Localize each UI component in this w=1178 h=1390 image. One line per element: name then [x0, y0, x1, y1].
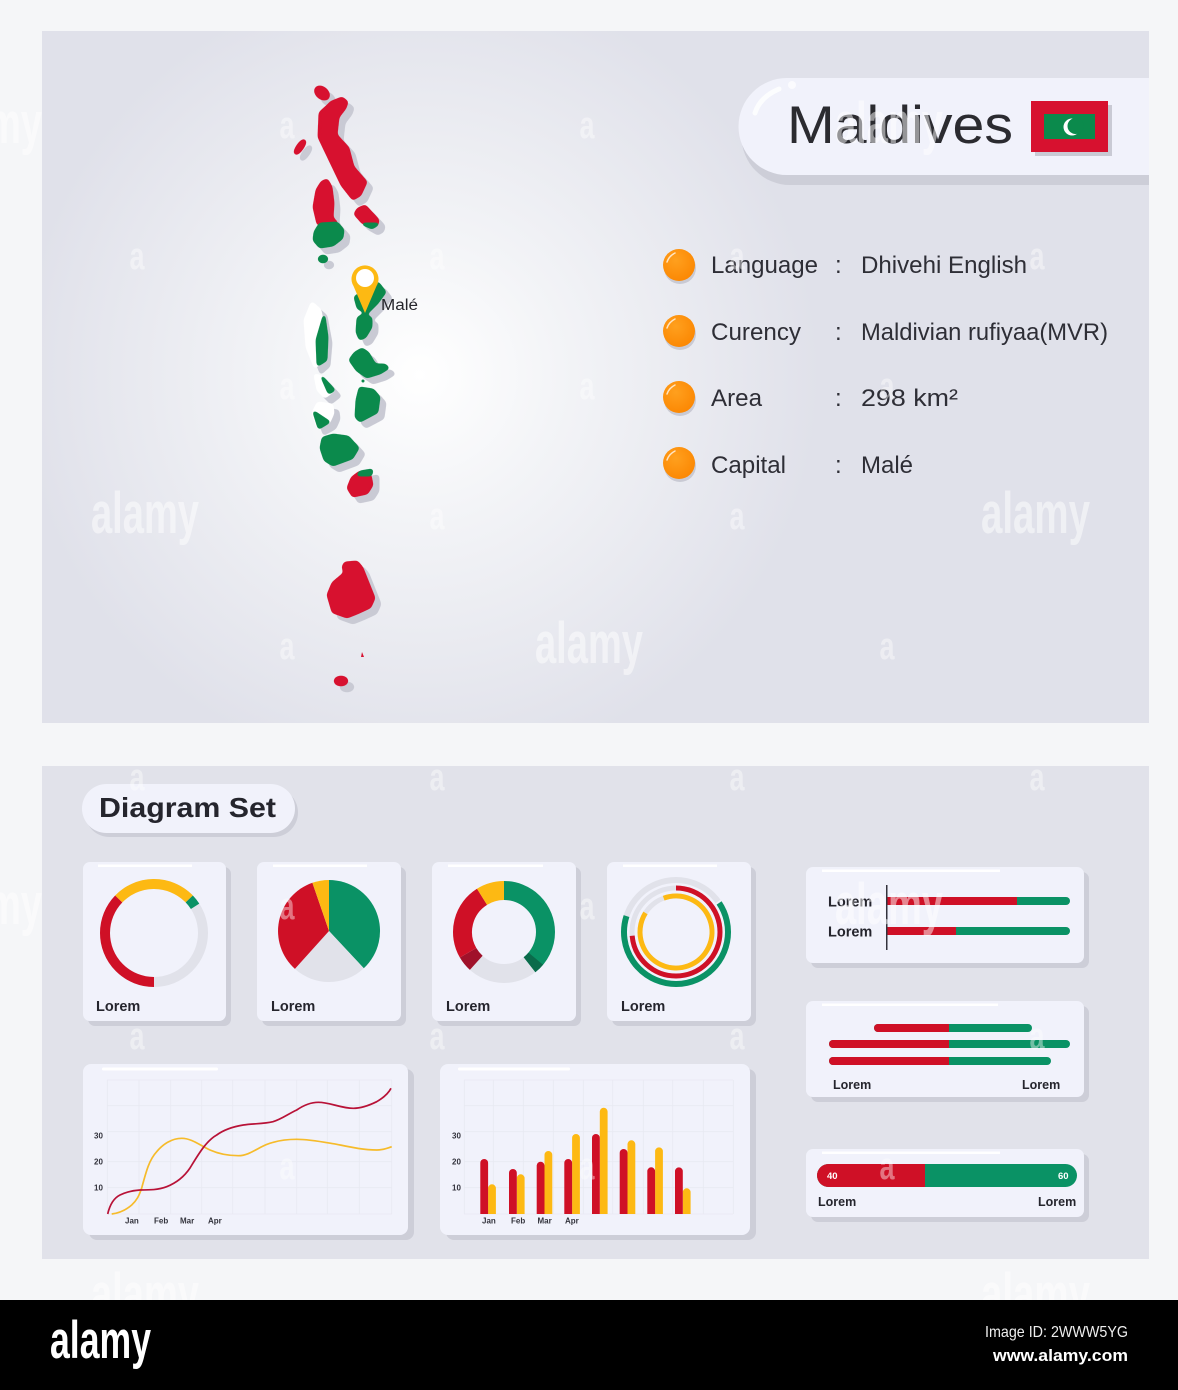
watermarks: a — [580, 366, 595, 408]
watermarks: a — [280, 366, 295, 408]
image id: Image ID: 2WWW5YG — [985, 1324, 1128, 1341]
panel: diagram set — [42, 766, 1149, 1259]
card: segmented donut: Lorem — [446, 999, 490, 1015]
card: diverging bars — [806, 1001, 1089, 1102]
watermarks: a — [430, 496, 445, 538]
watermarks: a — [730, 757, 745, 799]
panel: map and country facts — [42, 31, 1149, 723]
card: line chart: 20 — [94, 1158, 103, 1166]
watermarks: a — [880, 366, 895, 408]
watermarks: alamy — [91, 1262, 199, 1327]
watermarks: alamy — [535, 611, 643, 676]
map of the Maldives: red and white stripes of the flag — [293, 84, 378, 685]
watermarks: a — [130, 236, 145, 278]
card: line chart: Mar — [180, 1216, 194, 1226]
card: concentric rings — [603, 859, 756, 1026]
card: line chart: Feb — [154, 1216, 168, 1226]
card: line chart: Apr — [208, 1216, 222, 1226]
title banner — [739, 78, 1149, 185]
fact row: currency: : — [835, 319, 842, 346]
card: segmented donut — [432, 862, 581, 1026]
watermarks: a — [580, 105, 595, 147]
watermarks: a — [730, 1016, 745, 1058]
watermarks: a — [130, 1016, 145, 1058]
icon: capital location pin — [352, 265, 378, 313]
card: bar chart: Apr — [565, 1216, 579, 1226]
fact row: language — [663, 249, 1027, 284]
footer logo: alamy — [50, 1311, 151, 1370]
title text: Maldives — [787, 96, 1013, 155]
card: diverging bars: Lorem — [1022, 1078, 1060, 1092]
fact row: capital: Malé — [861, 452, 913, 479]
watermarks: a — [730, 236, 745, 278]
watermarks: alamy — [981, 481, 1090, 546]
map shadow — [299, 90, 394, 691]
tiny islets — [361, 380, 364, 657]
card: split 40/60 bar: 40 — [827, 1171, 838, 1182]
icon: flag of the Maldives — [1031, 101, 1112, 156]
card: bar chart: Feb — [511, 1216, 525, 1226]
heading: Diagram Set — [82, 784, 298, 837]
card: pie chart — [257, 862, 406, 1026]
card: bar chart: 30 — [452, 1132, 461, 1140]
fact row: area: 298 km² — [861, 385, 958, 412]
card: horizontal progress bars: Lorem — [828, 894, 872, 910]
watermarks: a — [280, 886, 295, 928]
fact row: capital — [663, 447, 913, 482]
watermarks: alamy — [981, 1262, 1090, 1327]
card: concentric rings: Lorem — [621, 999, 665, 1015]
fact row: currency: Curency — [711, 319, 801, 346]
fact row: area — [663, 381, 958, 416]
watermarks: a — [1030, 1016, 1045, 1058]
card: ring gauge: Lorem — [96, 999, 140, 1015]
watermarks: a — [280, 105, 295, 147]
watermarks: a — [430, 1016, 445, 1058]
footer band — [0, 1300, 1178, 1390]
heading: Diagram Set: Diagram Set — [99, 792, 276, 823]
watermarks: a — [880, 626, 895, 668]
watermarks: a — [430, 236, 445, 278]
fact row: language: Language — [711, 252, 818, 279]
capital label: Malé — [381, 297, 418, 314]
fact row: language: : — [835, 252, 842, 279]
fact row: capital: Capital — [711, 452, 786, 479]
card: split 40/60 bar: Lorem — [1038, 1195, 1076, 1209]
watermarks: alamy — [835, 872, 943, 937]
card: line chart: 10 — [94, 1184, 103, 1192]
fact row: currency: Maldivian rufiyaa(MVR) — [861, 319, 1108, 346]
card: line chart — [83, 1064, 414, 1240]
card: horizontal progress bars: Lorem — [828, 924, 872, 940]
card: line chart: 30 — [94, 1132, 103, 1140]
fact row: area: Area — [711, 385, 763, 412]
watermarks: a — [430, 757, 445, 799]
map of the Maldives: green centre of the flag — [314, 223, 388, 475]
watermarks: a — [580, 1146, 595, 1188]
card: bar chart: 10 — [452, 1184, 461, 1192]
card: bar chart — [440, 1064, 756, 1240]
card: horizontal progress bars — [806, 867, 1089, 968]
card: split 40/60 bar: Lorem — [818, 1195, 856, 1209]
watermarks: a — [1030, 757, 1045, 799]
watermarks: a — [580, 886, 595, 928]
watermarks: a — [1030, 236, 1045, 278]
fact row: capital: : — [835, 452, 842, 479]
website: www.alamy.com — [992, 1346, 1128, 1365]
watermarks: a — [280, 1146, 295, 1188]
watermarks: a — [130, 757, 145, 799]
card: diverging bars: Lorem — [833, 1078, 871, 1092]
card: ring gauge — [83, 862, 231, 1026]
watermarks: a — [880, 1146, 895, 1188]
watermarks: alamy — [835, 91, 943, 156]
card: split 40/60 bar: 60 — [1058, 1171, 1069, 1182]
fact row: currency — [663, 315, 1108, 350]
card: bar chart: Mar — [538, 1216, 552, 1226]
watermarks: a — [730, 496, 745, 538]
card: bar chart: Jan — [482, 1216, 496, 1226]
card: pie chart: Lorem — [271, 999, 315, 1015]
card: split 40/60 bar — [806, 1149, 1089, 1222]
card: bar chart: 20 — [452, 1158, 461, 1166]
watermarks: alamy — [91, 481, 199, 546]
watermarks: a — [280, 626, 295, 668]
card: line chart: Jan — [125, 1216, 139, 1226]
fact row: area: : — [835, 385, 842, 412]
fact row: language: Dhivehi English — [861, 252, 1027, 279]
